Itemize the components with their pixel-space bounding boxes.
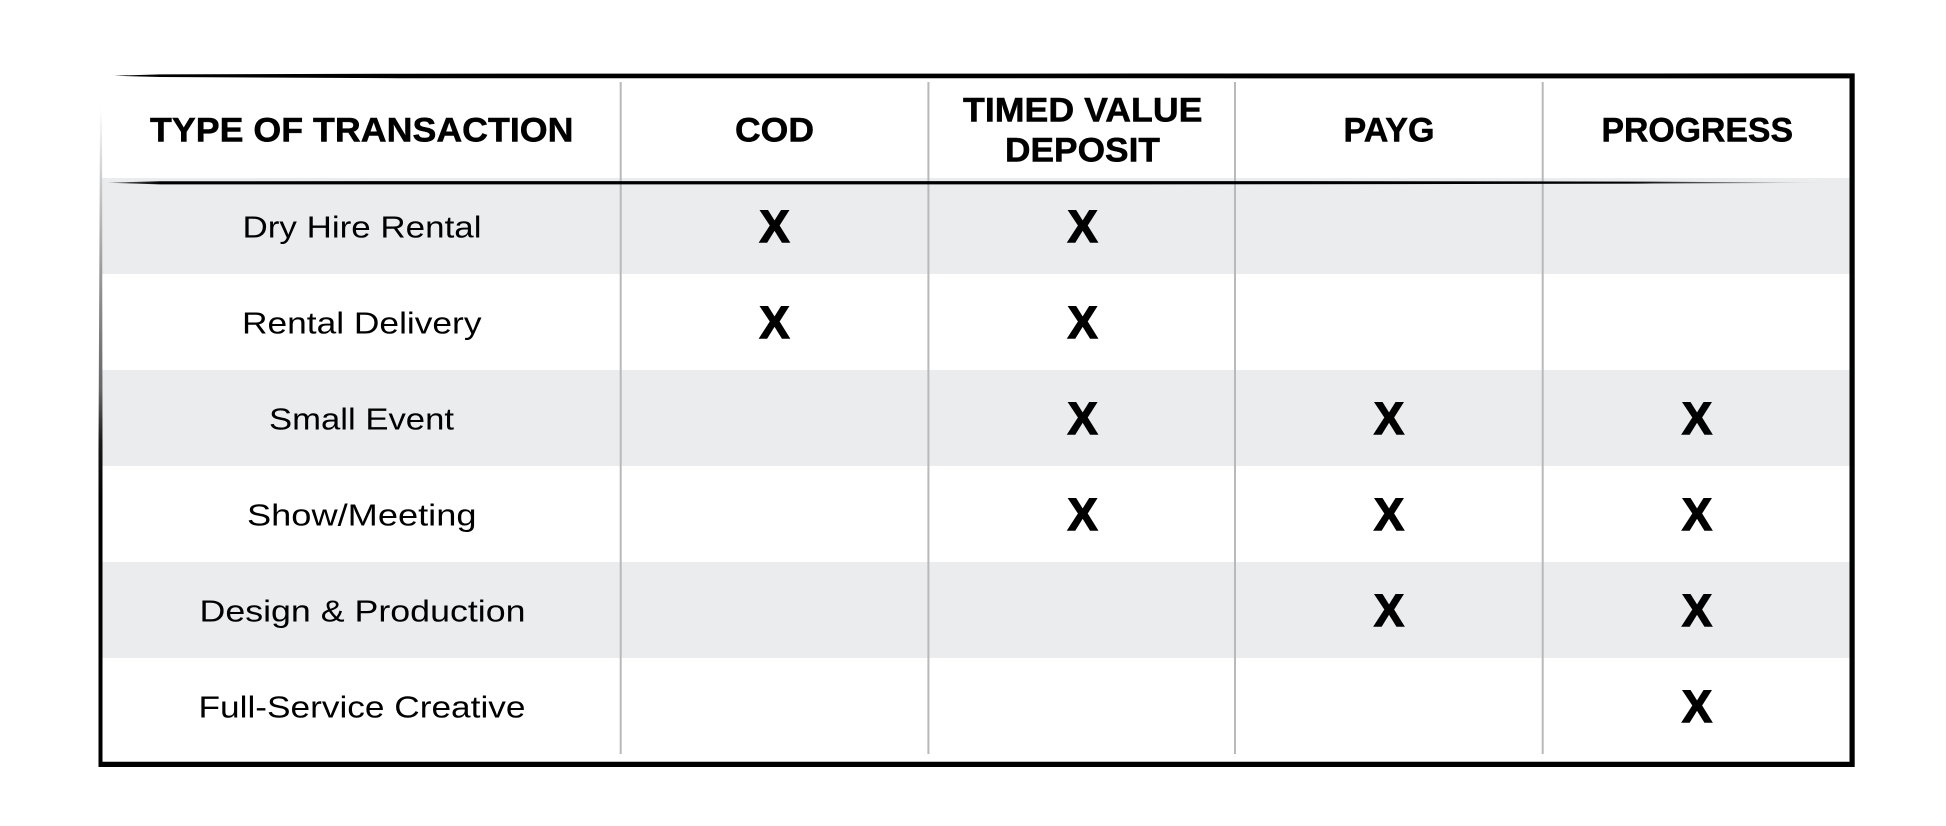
row: rental delivery	[242, 297, 1098, 348]
row: small event: X	[1682, 393, 1712, 444]
row: small event: X	[1068, 393, 1098, 444]
row: design and production: X	[1682, 585, 1712, 636]
row: show/meeting: X	[1374, 489, 1404, 540]
heading: timed value deposit: DEPOSIT	[1005, 132, 1160, 170]
table frame	[98, 73, 1855, 767]
column dividers	[620, 82, 1544, 754]
heading: progress: PROGRESS	[1602, 112, 1793, 150]
row: full-service creative: X	[1682, 681, 1712, 732]
row: full-service creative	[198, 681, 1712, 732]
row: full-service creative: Full-Service Creative	[198, 690, 526, 724]
row: dry hire rental: Dry Hire Rental	[242, 210, 482, 244]
row: design and production: X	[1374, 585, 1404, 636]
row: show/meeting: X	[1682, 489, 1712, 540]
row: show/meeting	[247, 489, 1712, 540]
row: design and production: Design & Production	[200, 594, 526, 628]
row: design and production	[200, 585, 1712, 636]
heading: type of transaction: TYPE OF TRANSACTION	[150, 112, 574, 150]
row: rental delivery: Rental Delivery	[242, 306, 482, 340]
row: dry hire rental: X	[759, 201, 790, 252]
heading: timed value deposit: TIMED VALUE	[963, 92, 1202, 130]
row: show/meeting: X	[1068, 489, 1098, 540]
row: rental delivery: X	[759, 297, 790, 348]
row: dry hire rental	[242, 201, 1098, 252]
heading: PAYG: PAYG	[1344, 112, 1434, 150]
header rule	[108, 181, 1835, 184]
header row	[150, 92, 1793, 170]
row: small event: Small Event	[269, 402, 455, 436]
row: dry hire rental: X	[1068, 201, 1098, 252]
alternating row bands	[102, 178, 1850, 658]
row: show/meeting: Show/Meeting	[247, 498, 476, 532]
row: rental delivery: X	[1068, 297, 1098, 348]
row: small event: X	[1374, 393, 1404, 444]
heading: COD: COD	[735, 112, 814, 150]
heading: timed value deposit	[963, 92, 1202, 170]
row: small event	[269, 393, 1712, 444]
